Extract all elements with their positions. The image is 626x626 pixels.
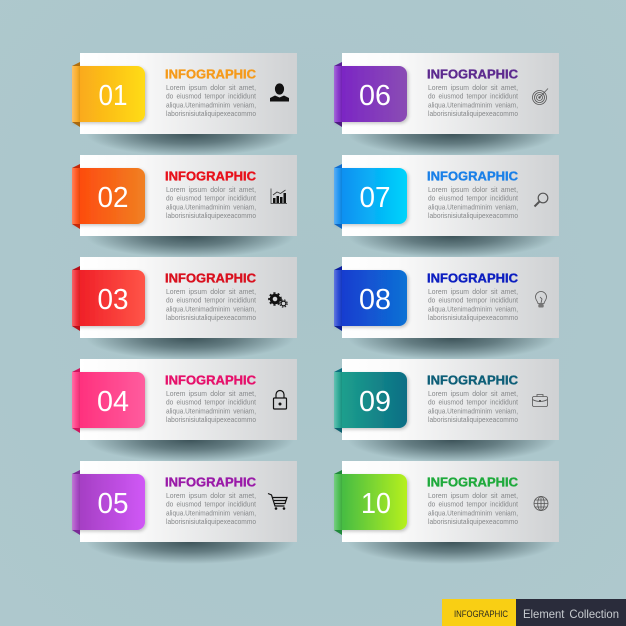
body text: Lorem ipsum dolor sit amet, [166,287,256,296]
body text: do eiusmod tempor incididunt [428,398,519,407]
icon: bar chart [271,188,287,204]
card shadow [348,520,556,564]
number tab [72,66,145,122]
number: 10 [361,488,391,520]
card shadow [86,112,294,156]
body text: laborisnisiutaliquipexeacommo [166,211,256,220]
body text: aliqua.Utenimadminim veniam, [166,202,256,211]
body text [166,185,257,220]
panel: card 08 [334,257,559,360]
body text: Lorem ipsum dolor sit amet, [166,389,256,398]
panel: card 09 [334,359,559,462]
heading: INFOGRAPHIC [427,168,519,183]
card body [80,53,297,134]
body text: laborisnisiutaliquipexeacommo [428,211,518,220]
body text: do eiusmod tempor incididunt [428,296,519,305]
heading: INFOGRAPHIC [427,66,519,81]
body text: laborisnisiutaliquipexeacommo [166,313,256,322]
body text: Lorem ipsum dolor sit amet, [166,83,256,92]
footer banner [442,599,626,626]
ribbon fold [334,62,342,127]
body text: do eiusmod tempor incididunt [166,194,257,203]
heading: INFOGRAPHIC [165,474,257,489]
number: 02 [98,182,128,214]
icon: padlock [274,390,286,409]
body text [428,185,519,220]
ribbon fold [334,266,342,331]
number: 01 [98,80,128,112]
body text: do eiusmod tempor incididunt [428,194,519,203]
body text: laborisnisiutaliquipexeacommo [428,109,518,118]
heading: INFOGRAPHIC [165,270,257,285]
ribbon fold [72,470,80,535]
card shadow [348,418,556,462]
body text: do eiusmod tempor incididunt [166,92,257,101]
body text [428,389,519,424]
card body [80,155,297,236]
body text: aliqua.Utenimadminim veniam, [428,304,518,313]
body text: Lorem ipsum dolor sit amet, [428,185,518,194]
footer yellow label [442,599,516,626]
body text: do eiusmod tempor incididunt [428,92,519,101]
body text: laborisnisiutaliquipexeacommo [428,313,518,322]
body text [166,491,257,526]
heading: INFOGRAPHIC [165,168,257,183]
card body [342,461,559,542]
footer text: infographic: INFOGRAPHIC [454,609,508,619]
heading: INFOGRAPHIC [165,66,257,81]
icon: gears [269,293,287,307]
card body [80,359,297,440]
body text: do eiusmod tempor incididunt [428,500,519,509]
body text: aliqua.Utenimadminim veniam, [166,304,256,313]
number tab [334,474,407,530]
number tab [72,270,145,326]
card shadow [348,316,556,360]
card body [342,359,559,440]
number: 05 [98,488,128,520]
ribbon fold [334,368,342,433]
number tab [72,168,145,224]
icon: briefcase [532,394,548,406]
card body [342,53,559,134]
body text: laborisnisiutaliquipexeacommo [428,517,518,526]
card shadow [86,214,294,258]
icon: magnifier [534,193,548,206]
body text: laborisnisiutaliquipexeacommo [166,109,256,118]
panel: card 04 [72,359,297,462]
number tab [334,270,407,326]
heading: INFOGRAPHIC [427,270,519,285]
footer text: element collection: Element Collection [523,607,619,621]
panel: card 07 [334,155,559,258]
ribbon fold [72,62,80,127]
body text [166,83,257,118]
number: 09 [359,386,391,418]
card body [342,155,559,236]
panel: card 01 [72,53,297,156]
card shadow [348,112,556,156]
body text: Lorem ipsum dolor sit amet, [428,83,518,92]
panel: card 03 [72,257,297,360]
icon: person [270,83,289,102]
ribbon fold [334,164,342,229]
ribbon fold [72,164,80,229]
body text: aliqua.Utenimadminim veniam, [428,202,518,211]
icon: shopping cart [268,494,287,510]
number: 08 [359,284,391,316]
card shadow [86,520,294,564]
number tab [72,372,145,428]
panel: card 06 [334,53,559,156]
panel: card 05 [72,461,297,564]
card shadow [348,214,556,258]
body text [428,491,519,526]
body text: aliqua.Utenimadminim veniam, [166,508,256,517]
heading: INFOGRAPHIC [427,474,519,489]
body text: Lorem ipsum dolor sit amet, [428,287,518,296]
card body [80,257,297,338]
number: 03 [98,284,128,316]
number: 06 [359,80,391,112]
number tab [334,168,407,224]
ribbon fold [334,470,342,535]
ribbon fold [72,266,80,331]
body text: aliqua.Utenimadminim veniam, [428,100,518,109]
body text: aliqua.Utenimadminim veniam, [428,508,518,517]
body text: laborisnisiutaliquipexeacommo [166,517,256,526]
panel: card 10 [334,461,559,564]
body text [166,287,257,322]
icon: target [532,88,548,104]
number: 04 [97,386,129,418]
body text: Lorem ipsum dolor sit amet, [428,491,518,500]
body text: do eiusmod tempor incididunt [166,296,257,305]
card shadow [86,316,294,360]
icon: light bulb [536,292,546,308]
heading: INFOGRAPHIC [427,372,519,387]
body text [166,389,257,424]
icon: globe [534,496,548,510]
panel: card 02 [72,155,297,258]
body text: Lorem ipsum dolor sit amet, [428,389,518,398]
number: 07 [360,182,390,214]
body text [428,83,519,118]
body text: aliqua.Utenimadminim veniam, [428,406,518,415]
body text: laborisnisiutaliquipexeacommo [428,415,518,424]
body text: aliqua.Utenimadminim veniam, [166,100,256,109]
body text: aliqua.Utenimadminim veniam, [166,406,256,415]
footer dark label [516,599,626,626]
card body [80,461,297,542]
body text: do eiusmod tempor incididunt [166,398,257,407]
body text: laborisnisiutaliquipexeacommo [166,415,256,424]
body text: Lorem ipsum dolor sit amet, [166,491,256,500]
number tab [72,474,145,530]
body text: do eiusmod tempor incididunt [166,500,257,509]
card shadow [86,418,294,462]
card body [342,257,559,338]
ribbon fold [72,368,80,433]
number tab [334,66,407,122]
heading: INFOGRAPHIC [165,372,257,387]
number tab [334,372,407,428]
body text: Lorem ipsum dolor sit amet, [166,185,256,194]
body text [428,287,519,322]
